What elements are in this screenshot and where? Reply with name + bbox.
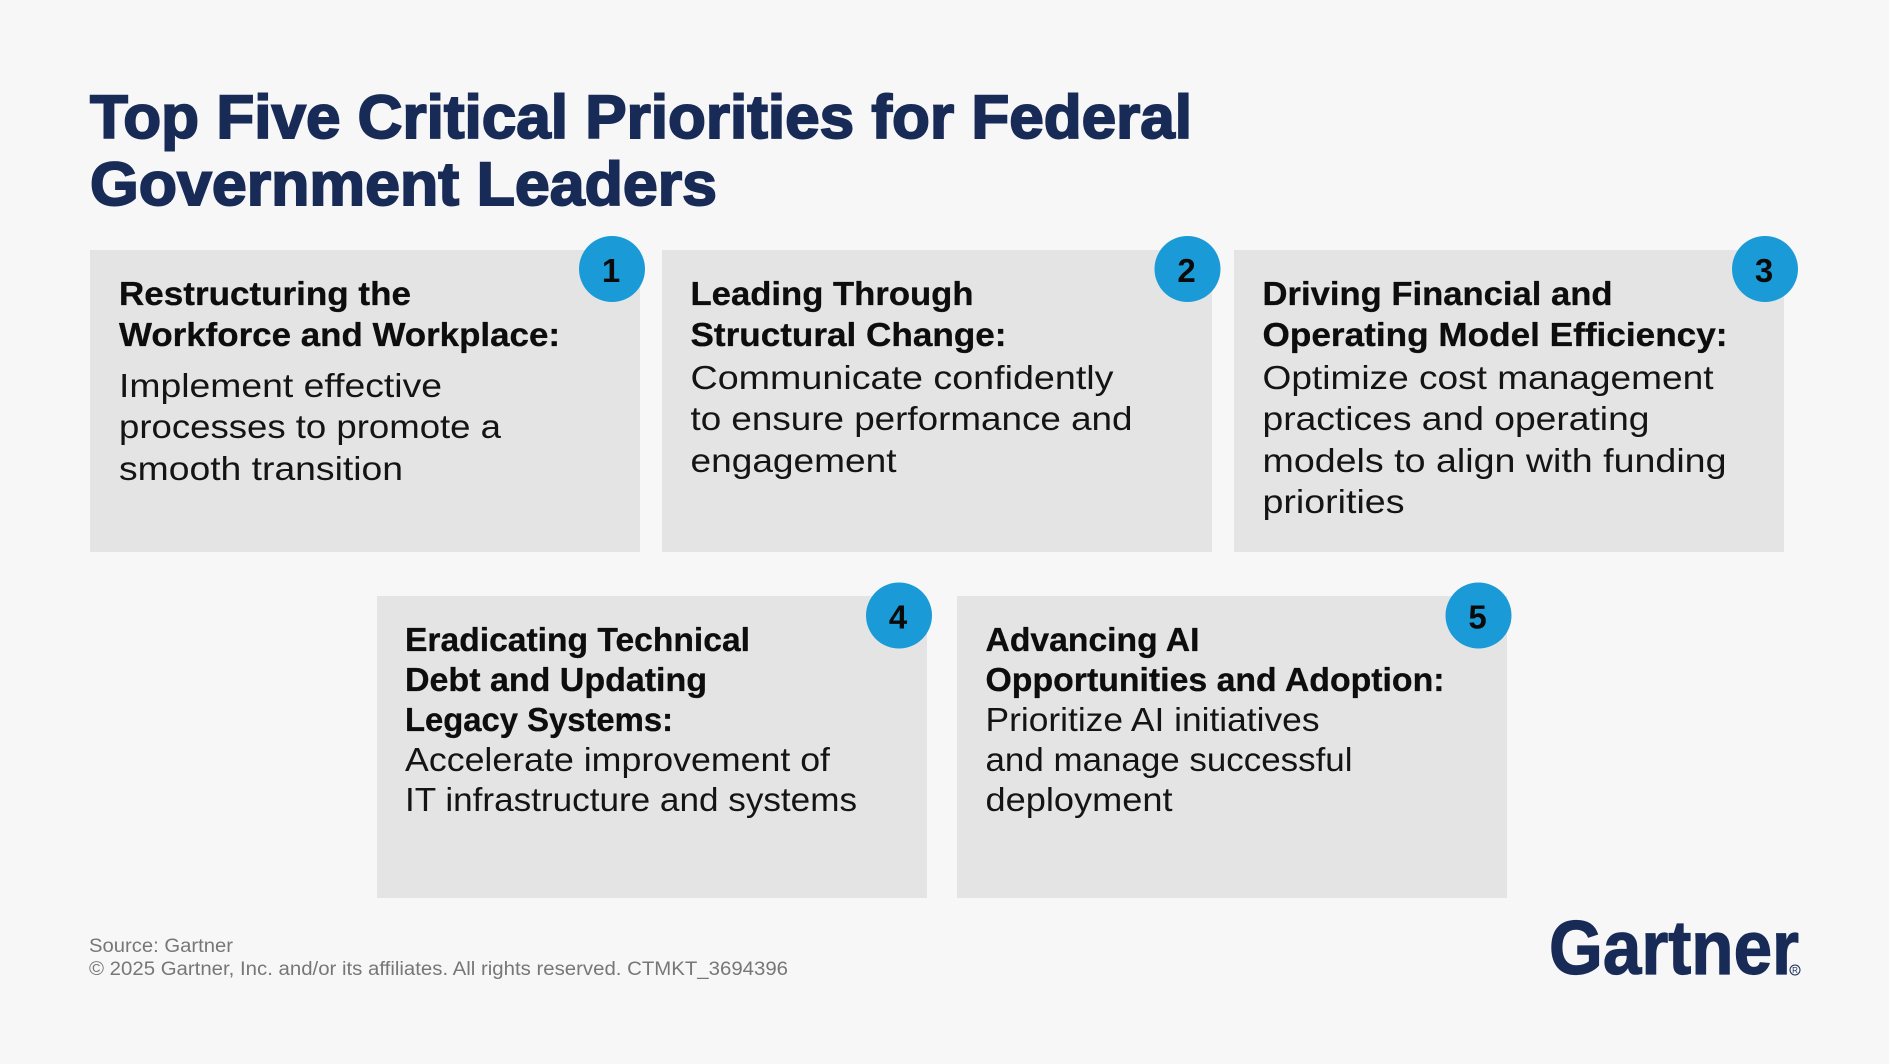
body text bbox=[119, 367, 502, 487]
heading: Operating Model Efficiency: bbox=[1262, 316, 1728, 353]
heading: Debt and Updating bbox=[405, 661, 707, 698]
body text bbox=[1262, 359, 1726, 520]
number badge 5 bbox=[1446, 582, 1512, 648]
body text: deployment bbox=[986, 781, 1172, 818]
source and copyright: © 2025 Gartner, Inc. and/or its affiliates. All rights reserved. CTMKT_3694396 bbox=[89, 959, 788, 980]
number badge 4 bbox=[866, 582, 932, 648]
body text: smooth transition bbox=[119, 450, 403, 487]
source and copyright bbox=[89, 936, 788, 980]
heading: Eradicating Technical bbox=[405, 621, 750, 658]
title bbox=[90, 83, 1192, 218]
number badge 3 bbox=[1732, 236, 1798, 302]
body text: models to align with funding bbox=[1262, 442, 1726, 479]
heading: Structural Change: bbox=[690, 316, 1006, 353]
number badge 3: 3 bbox=[1755, 252, 1773, 289]
body text: to ensure performance and bbox=[690, 400, 1132, 437]
logo: Gartner: R bbox=[1792, 966, 1798, 975]
panel: priority 1 bbox=[90, 236, 645, 552]
card background bbox=[662, 250, 1212, 552]
source and copyright: Source: Gartner bbox=[89, 936, 234, 957]
heading bbox=[119, 275, 560, 353]
number badge 5: 5 bbox=[1468, 598, 1487, 636]
body text: engagement bbox=[690, 442, 896, 479]
heading bbox=[986, 621, 1444, 698]
body text: IT infrastructure and systems bbox=[405, 781, 857, 818]
number badge 1: 1 bbox=[602, 252, 620, 289]
number badge 1 bbox=[579, 236, 645, 302]
heading: Advancing AI bbox=[986, 621, 1200, 658]
number badge 4: 4 bbox=[889, 598, 908, 636]
heading: Workforce and Workplace: bbox=[119, 316, 560, 353]
panel: priority 2 bbox=[662, 236, 1220, 552]
number badge 2 bbox=[1154, 236, 1220, 302]
number badge 2: 2 bbox=[1177, 252, 1196, 289]
body text: Accelerate improvement of bbox=[405, 741, 831, 778]
card background bbox=[90, 250, 640, 552]
body text: Optimize cost management bbox=[1262, 359, 1714, 396]
heading bbox=[1262, 275, 1728, 353]
heading: Driving Financial and bbox=[1262, 275, 1612, 312]
panel: priority 3 bbox=[1234, 236, 1798, 552]
body text: Prioritize AI initiatives bbox=[986, 701, 1320, 738]
heading: Leading Through bbox=[690, 275, 974, 312]
body text: and manage successful bbox=[986, 741, 1352, 778]
heading: Legacy Systems: bbox=[405, 701, 673, 738]
body text: practices and operating bbox=[1262, 400, 1650, 437]
body text: Implement effective bbox=[119, 367, 442, 404]
card background bbox=[1234, 250, 1784, 552]
body text bbox=[986, 701, 1352, 818]
body text bbox=[405, 741, 857, 818]
card background bbox=[957, 596, 1507, 898]
panel: priority 4 bbox=[377, 582, 932, 898]
heading bbox=[690, 275, 1006, 353]
heading: Opportunities and Adoption: bbox=[986, 661, 1444, 698]
body text bbox=[690, 359, 1132, 479]
title: Top Five Critical Priorities for Federal bbox=[90, 83, 1192, 151]
body text: priorities bbox=[1262, 483, 1404, 520]
body text: processes to promote a bbox=[119, 408, 502, 445]
card background bbox=[377, 596, 927, 898]
body text: Communicate confidently bbox=[690, 359, 1114, 396]
heading bbox=[405, 621, 750, 738]
panel: priority 5 bbox=[957, 582, 1512, 898]
logo: Gartner: Gartner bbox=[1549, 906, 1799, 991]
heading: Restructuring the bbox=[119, 275, 411, 312]
title: Government Leaders bbox=[90, 150, 717, 218]
